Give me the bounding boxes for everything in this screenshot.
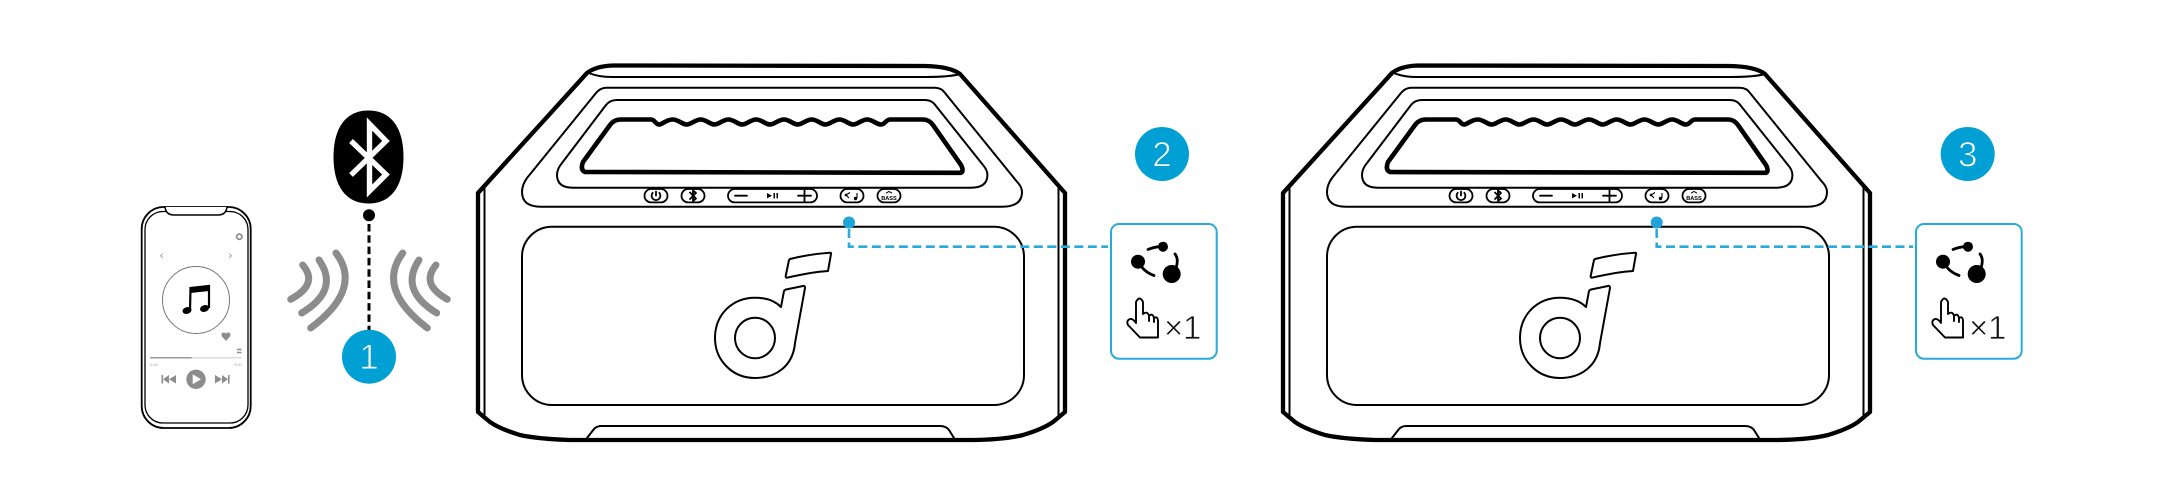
speaker 1: [478, 66, 1065, 440]
icon: hand press: [1127, 298, 1158, 338]
step badge 1: 1: [359, 338, 379, 377]
press count: ×: [1969, 309, 1988, 346]
step badge 3: 3: [1958, 136, 1977, 174]
button row: [644, 189, 900, 202]
phone: [142, 207, 251, 428]
front grille panel: [1327, 227, 1829, 405]
foot: [587, 426, 954, 438]
dotted connector: [363, 209, 375, 331]
button row: BASS: [881, 196, 897, 202]
step badge 2: 2: [1152, 136, 1172, 174]
step badge 1: [342, 330, 396, 384]
step badge 3: [1941, 127, 1995, 181]
callout: stereo pairing button, press once: 1: [1183, 309, 1201, 346]
button row: BASS: [1686, 196, 1702, 202]
icon: right signal waves: [394, 253, 447, 328]
logo: [1520, 253, 1636, 378]
top control panel: [1327, 88, 1827, 207]
icon: music note: [182, 286, 210, 315]
press count: ×: [1164, 309, 1183, 346]
icon: bluetooth badge: [334, 110, 404, 204]
step badge 2: [1135, 127, 1189, 181]
foot: [1392, 426, 1759, 438]
callout connector 3: [1651, 216, 1913, 247]
button row: [1450, 189, 1706, 202]
callout connector 2: [843, 216, 1108, 247]
callout: stereo pairing button, press once: [1111, 224, 1217, 359]
handle opening: [1387, 120, 1768, 173]
handle opening: [582, 120, 962, 173]
logo: [715, 253, 831, 378]
top control panel: [522, 88, 1022, 207]
callout: stereo pairing button, press once on second speaker: 1: [1988, 309, 2006, 346]
phone: 3:00: [234, 362, 243, 367]
speaker 2: [1283, 66, 1870, 440]
icon: link: [1936, 242, 1986, 283]
icon: left signal waves: [291, 253, 345, 328]
icon: hand press: [1932, 298, 1963, 338]
phone: 0:00: [150, 362, 159, 367]
callout: stereo pairing button, press once on second speaker: [1916, 224, 2022, 359]
front grille panel: [522, 227, 1024, 405]
icon: playback controls: [162, 370, 230, 389]
icon: link: [1131, 242, 1181, 283]
